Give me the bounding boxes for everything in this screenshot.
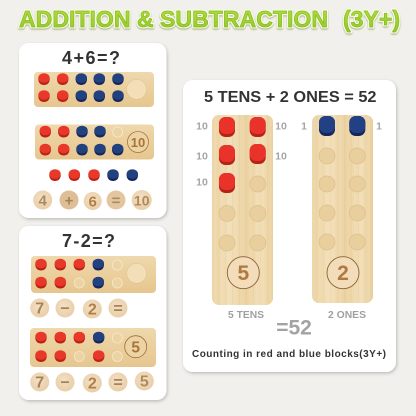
value labels: 1 [376, 120, 382, 132]
heading: 7-2=?: 7-2=? [62, 231, 115, 251]
value labels: 10 [196, 176, 208, 188]
number tokens: 7 - 2 =: − [60, 300, 70, 318]
number tokens: 7 - 2 = 5: = [113, 374, 123, 392]
panel: place value 52 [183, 80, 396, 372]
number tokens: 4 + 6 = 10: 4 [39, 192, 48, 210]
number tokens: 4 + 6 = 10: 6 [89, 194, 97, 210]
value labels: 10 [196, 150, 208, 162]
heading: 5 TENS + 2 ONES = 52: 5 TENS + 2 ONES = 52 [204, 89, 377, 106]
number tokens: 7 - 2 =: 7 [35, 300, 44, 318]
result: =52: =52 [276, 316, 312, 340]
board: tens [212, 115, 273, 305]
board: tens: 5 [237, 262, 249, 285]
board: ones [312, 115, 373, 303]
title: ADDITION & SUBTRACTION [19, 6, 328, 32]
number tokens: 7 - 2 =: = [113, 300, 123, 318]
board: result with 5 disc: 5 [131, 340, 140, 356]
board: 4 red and 6 blue pegs with empty slot [34, 72, 154, 107]
value labels: 10 [275, 120, 287, 132]
number tokens: 7 - 2 = 5 [30, 372, 154, 392]
board: result with 5 disc [30, 328, 156, 367]
board: 7 pegs with empty slot [31, 256, 156, 293]
number tokens: 7 - 2 = 5: 7 [35, 374, 44, 392]
number tokens: 4 + 6 = 10: 10 [134, 192, 150, 208]
board: result with 10 disc: 10 [131, 135, 145, 150]
caption: 5 TENS: 5 TENS [228, 310, 264, 321]
number tokens: 4 + 6 = 10 [33, 190, 152, 210]
board: ones: 2 [337, 262, 349, 285]
heading: 4+6=?: 4+6=? [62, 48, 120, 68]
title: (3Y+) [343, 6, 400, 32]
panel: subtraction 7-2 [19, 226, 166, 400]
number tokens: 7 - 2 = 5: − [60, 374, 70, 392]
board: result with 10 disc [35, 124, 154, 160]
number tokens: 4 + 6 = 10: + [65, 192, 74, 210]
title: (3Y+) [343, 6, 400, 32]
footer caption: Counting in red and blue blocks(3Y+) [192, 349, 386, 360]
value labels: 10 [196, 120, 208, 132]
number tokens: 4 + 6 = 10: = [112, 192, 121, 210]
number tokens: 7 - 2 = 5: 5 [140, 374, 149, 390]
number tokens: 7 - 2 = 5: 2 [88, 376, 97, 392]
number tokens: 7 - 2 =: 2 [88, 302, 97, 318]
panel: addition 4+6 [19, 43, 166, 218]
value labels [196, 120, 382, 188]
value labels: 10 [275, 150, 287, 162]
caption: 2 ONES: 2 ONES [328, 310, 366, 321]
number tokens: 7 - 2 = [30, 298, 128, 318]
loose pegs row [49, 169, 138, 181]
title: ADDITION & SUBTRACTION [19, 6, 328, 32]
value labels: 1 [301, 120, 307, 132]
